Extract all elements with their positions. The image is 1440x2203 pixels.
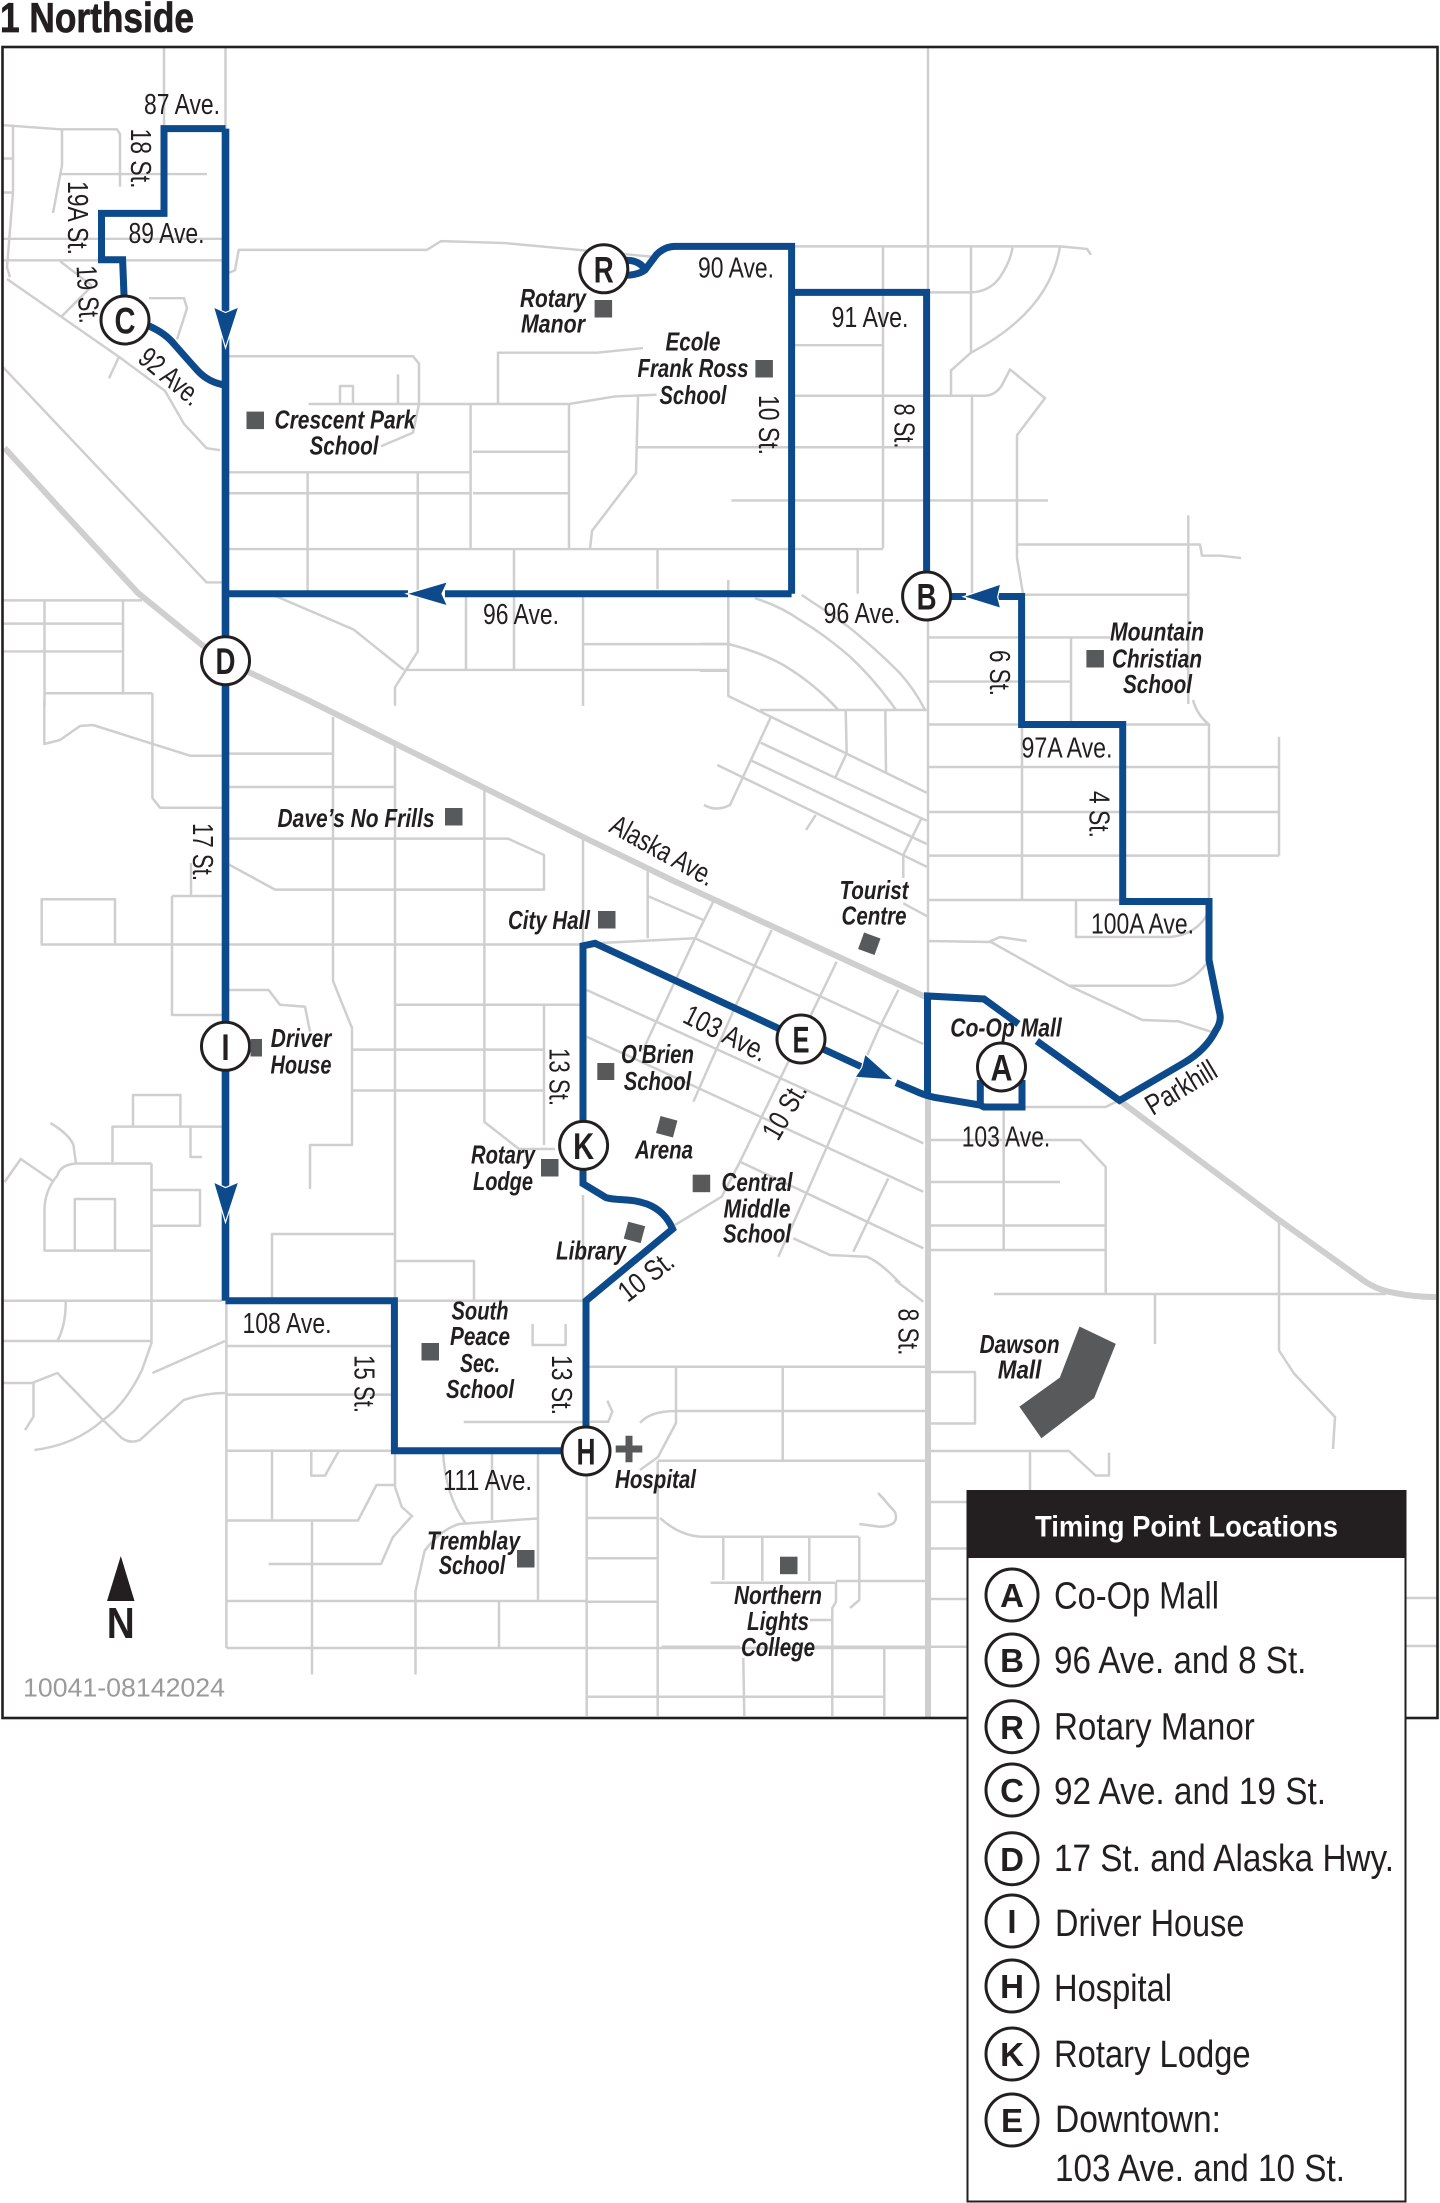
bus route line: [102, 129, 1220, 1451]
legend row K: [986, 2028, 1251, 2080]
place: Central Middle School: [693, 1167, 793, 1249]
street label: 100A Ave.: 100A Ave.: [1091, 909, 1194, 941]
legend row E: [986, 2094, 1345, 2190]
street grid: central and south: [2, 580, 1437, 1716]
place: Tourist Centre: [840, 875, 910, 955]
place: Ecole Frank Ross School: [638, 326, 773, 410]
place: Tourist Centre: Centre: [842, 900, 906, 930]
place: Rotary Lodge: [471, 1140, 558, 1196]
legend row D: [986, 1833, 1394, 1885]
place: Mountain Christian School: School: [1123, 669, 1193, 699]
legend row D: D: [1000, 1841, 1024, 1878]
timing point marker D: D: [216, 641, 236, 682]
place: Co-Op Mall: Co-Op Mall: [950, 1013, 1062, 1043]
place: Rotary Manor: [520, 283, 612, 339]
place: Ecole Frank Ross School: School: [660, 380, 727, 410]
place: South Peace Sec. School: South: [452, 1296, 508, 1326]
street label: 10 St. north: 10 St.: [752, 395, 784, 455]
icon: north arrow: N: [107, 1599, 135, 1648]
timing point marker A: A: [990, 1048, 1012, 1088]
legend row I: Driver House: [1055, 1903, 1244, 1945]
place: Mountain Christian School: Christian: [1112, 643, 1202, 673]
timing point marker I: I: [222, 1027, 230, 1068]
legend row B: B: [1000, 1642, 1024, 1679]
arrow: southbound on 17 St north: [214, 307, 239, 348]
timing point marker H: H: [576, 1432, 596, 1472]
legend row C: 92 Ave. and 19 St.: [1054, 1771, 1326, 1813]
highway: Alaska Highway and 8 Street: [5, 448, 1436, 1718]
place: Dave's No Frills: Dave’s No Frills: [278, 803, 434, 833]
legend row B: [986, 1634, 1306, 1686]
timing point marker H: [562, 1427, 610, 1475]
street label: 19 St.: 19 St.: [69, 265, 104, 324]
place: South Peace Sec. School: [422, 1296, 515, 1404]
timing point marker A: [978, 1043, 1026, 1091]
legend row R: Rotary Manor: [1054, 1707, 1255, 1749]
place: Dawson Mall with building: Mall: [998, 1355, 1042, 1385]
place: Dawson Mall with building: Dawson: [980, 1329, 1060, 1359]
street grid: north half: [2, 47, 1241, 724]
place: Crescent Park School: [246, 405, 417, 460]
place: Library: [556, 1222, 645, 1265]
street label: 4 St.: 4 St.: [1083, 791, 1115, 838]
place: Tourist Centre: Tourist: [840, 875, 910, 905]
place: Central Middle School: Middle: [724, 1193, 790, 1223]
place: Rotary Lodge: Lodge: [473, 1166, 533, 1196]
street label: 19A St.: 19A St.: [61, 181, 93, 255]
place: Driver House: [250, 1023, 333, 1080]
legend row C: C: [1000, 1772, 1024, 1809]
street label: 108 Ave.: 108 Ave.: [242, 1308, 332, 1340]
place: Dawson Mall with building: [980, 1326, 1116, 1438]
place: O'Brien School: [597, 1039, 694, 1096]
street label: 91 Ave.: 91 Ave.: [832, 302, 908, 334]
street label: Alaska Ave.: Alaska Ave.: [604, 809, 720, 893]
legend row I: [986, 1895, 1244, 1947]
legend row A: Co-Op Mall: [1054, 1576, 1219, 1618]
street label: 96 Ave. west: 96 Ave.: [483, 599, 559, 631]
place: Mountain Christian School: Mountain: [1110, 617, 1204, 647]
timing point marker R: R: [594, 249, 614, 290]
place: Arena: Arena: [634, 1134, 693, 1164]
legend row E: E: [1001, 2102, 1023, 2139]
street label: 8 St. north: 8 St.: [888, 404, 920, 448]
place: Driver House: Driver: [271, 1023, 333, 1053]
timing point marker C: C: [114, 300, 136, 342]
place: Northern Lights College: Northern: [734, 1580, 822, 1610]
place: Ecole Frank Ross School: Ecole: [666, 326, 720, 356]
map frame: [2, 47, 1438, 1718]
place: Central Middle School: School: [723, 1219, 792, 1249]
street label: 92 Ave.: 92 Ave.: [132, 342, 208, 413]
place: Driver House: House: [270, 1050, 332, 1080]
legend row K: Rotary Lodge: [1054, 2034, 1251, 2076]
legend row H: H: [1000, 1968, 1024, 2005]
arrow: southbound on 17 St south: [214, 1182, 239, 1222]
place: City Hall: City Hall: [508, 905, 591, 935]
place: Hospital with plus icon: [615, 1436, 697, 1494]
timing point marker B: B: [917, 576, 937, 618]
legend row K: K: [1000, 2036, 1024, 2073]
timing point marker B: [903, 572, 951, 620]
street label: 111 Ave.: 111 Ave.: [443, 1465, 532, 1497]
legend row H: Hospital: [1054, 1968, 1172, 2010]
timing point marker K: K: [573, 1126, 594, 1167]
place: Central Middle School: Central: [722, 1167, 793, 1197]
place: Mountain Christian School: [1086, 617, 1204, 699]
place: Rotary Manor: Manor: [521, 309, 587, 339]
street label: 87 Ave.: 87 Ave.: [144, 89, 220, 121]
timing point marker K: [560, 1121, 608, 1169]
timing point marker I: [202, 1022, 250, 1070]
panel: timing point locations legend: [966, 1490, 1406, 2202]
place: Tremblay School: Tremblay: [427, 1525, 521, 1555]
place: Ecole Frank Ross School: Frank Ross: [638, 353, 748, 383]
street label: 6 St.: 6 St.: [983, 650, 1015, 696]
map reference code: 10041-08142024: [23, 1673, 225, 1703]
place: Northern Lights College: Lights: [747, 1606, 809, 1636]
timing point marker R: [580, 245, 628, 293]
place: Tremblay School: [427, 1525, 534, 1580]
timing point marker C: [101, 296, 149, 344]
legend row A: [986, 1569, 1219, 1621]
legend row H: [986, 1960, 1172, 2012]
legend row A: A: [1000, 1577, 1024, 1614]
place: Hospital with plus icon: Hospital: [615, 1464, 697, 1494]
legend row R: [986, 1701, 1255, 1753]
place: Arena: [634, 1116, 693, 1164]
place: Tremblay School: School: [439, 1550, 506, 1580]
place: Northern Lights College: [734, 1557, 822, 1662]
legend row B: 96 Ave. and 8 St.: [1054, 1640, 1306, 1682]
street label: 89 Ave.: 89 Ave.: [128, 218, 204, 250]
street label: 13 St. south: 13 St.: [545, 1355, 577, 1415]
street label: 97A Ave.: 97A Ave.: [1022, 733, 1112, 765]
icon: north arrow: [107, 1556, 135, 1648]
legend row C: [986, 1764, 1326, 1816]
place: South Peace Sec. School: Sec.: [460, 1348, 500, 1378]
legend header: Timing Point Locations: [1035, 1510, 1338, 1544]
street label: 15 St.: 15 St.: [348, 1355, 380, 1413]
street label: 13 St. north: 13 St.: [543, 1048, 575, 1106]
street label: 18 St.: 18 St.: [124, 128, 156, 188]
legend row E: Downtown:: [1055, 2099, 1221, 2141]
street label: 103 Ave. east: 103 Ave.: [962, 1121, 1050, 1153]
place: Crescent Park School: Crescent Park: [274, 405, 417, 435]
timing point marker E: [777, 1015, 825, 1063]
legend row R: R: [1000, 1709, 1024, 1746]
place: South Peace Sec. School: School: [446, 1374, 515, 1404]
arrow: westbound to B: [963, 584, 1001, 608]
street label: Parkhill: Parkhill: [1140, 1054, 1223, 1122]
street label: 10 St. south: 10 St.: [612, 1245, 681, 1309]
timing point marker D: [202, 637, 250, 685]
street label: 17 St.: 17 St.: [186, 823, 218, 881]
street label: 103 Ave. downtown: 103 Ave.: [678, 999, 773, 1069]
arrow: westbound on 96 Ave: [406, 582, 448, 606]
legend row I: I: [1007, 1903, 1017, 1940]
arrow: eastbound on 103 Ave: [855, 1054, 894, 1080]
street label: 10 St. downtown: 10 St.: [756, 1078, 814, 1145]
place: O'Brien School: School: [624, 1066, 692, 1096]
timing point marker E: E: [792, 1020, 810, 1060]
street label: 96 Ave. east: 96 Ave.: [824, 598, 900, 630]
place: Crescent Park School: School: [310, 430, 379, 460]
legend row D: 17 St. and Alaska Hwy.: [1054, 1838, 1394, 1880]
street label: 90 Ave.: 90 Ave.: [698, 253, 774, 285]
place: Library: Library: [556, 1235, 627, 1265]
place: Rotary Lodge: Rotary: [471, 1140, 536, 1170]
place: Rotary Manor: Rotary: [520, 283, 587, 313]
legend row E: 103 Ave. and 10 St.: [1055, 2148, 1345, 2190]
street label: 8 St. south: 8 St.: [891, 1308, 923, 1356]
legend header: [966, 1490, 1406, 1558]
place: O'Brien School: O'Brien: [621, 1039, 694, 1069]
place: Northern Lights College: College: [741, 1632, 815, 1662]
place: South Peace Sec. School: Peace: [450, 1321, 510, 1351]
